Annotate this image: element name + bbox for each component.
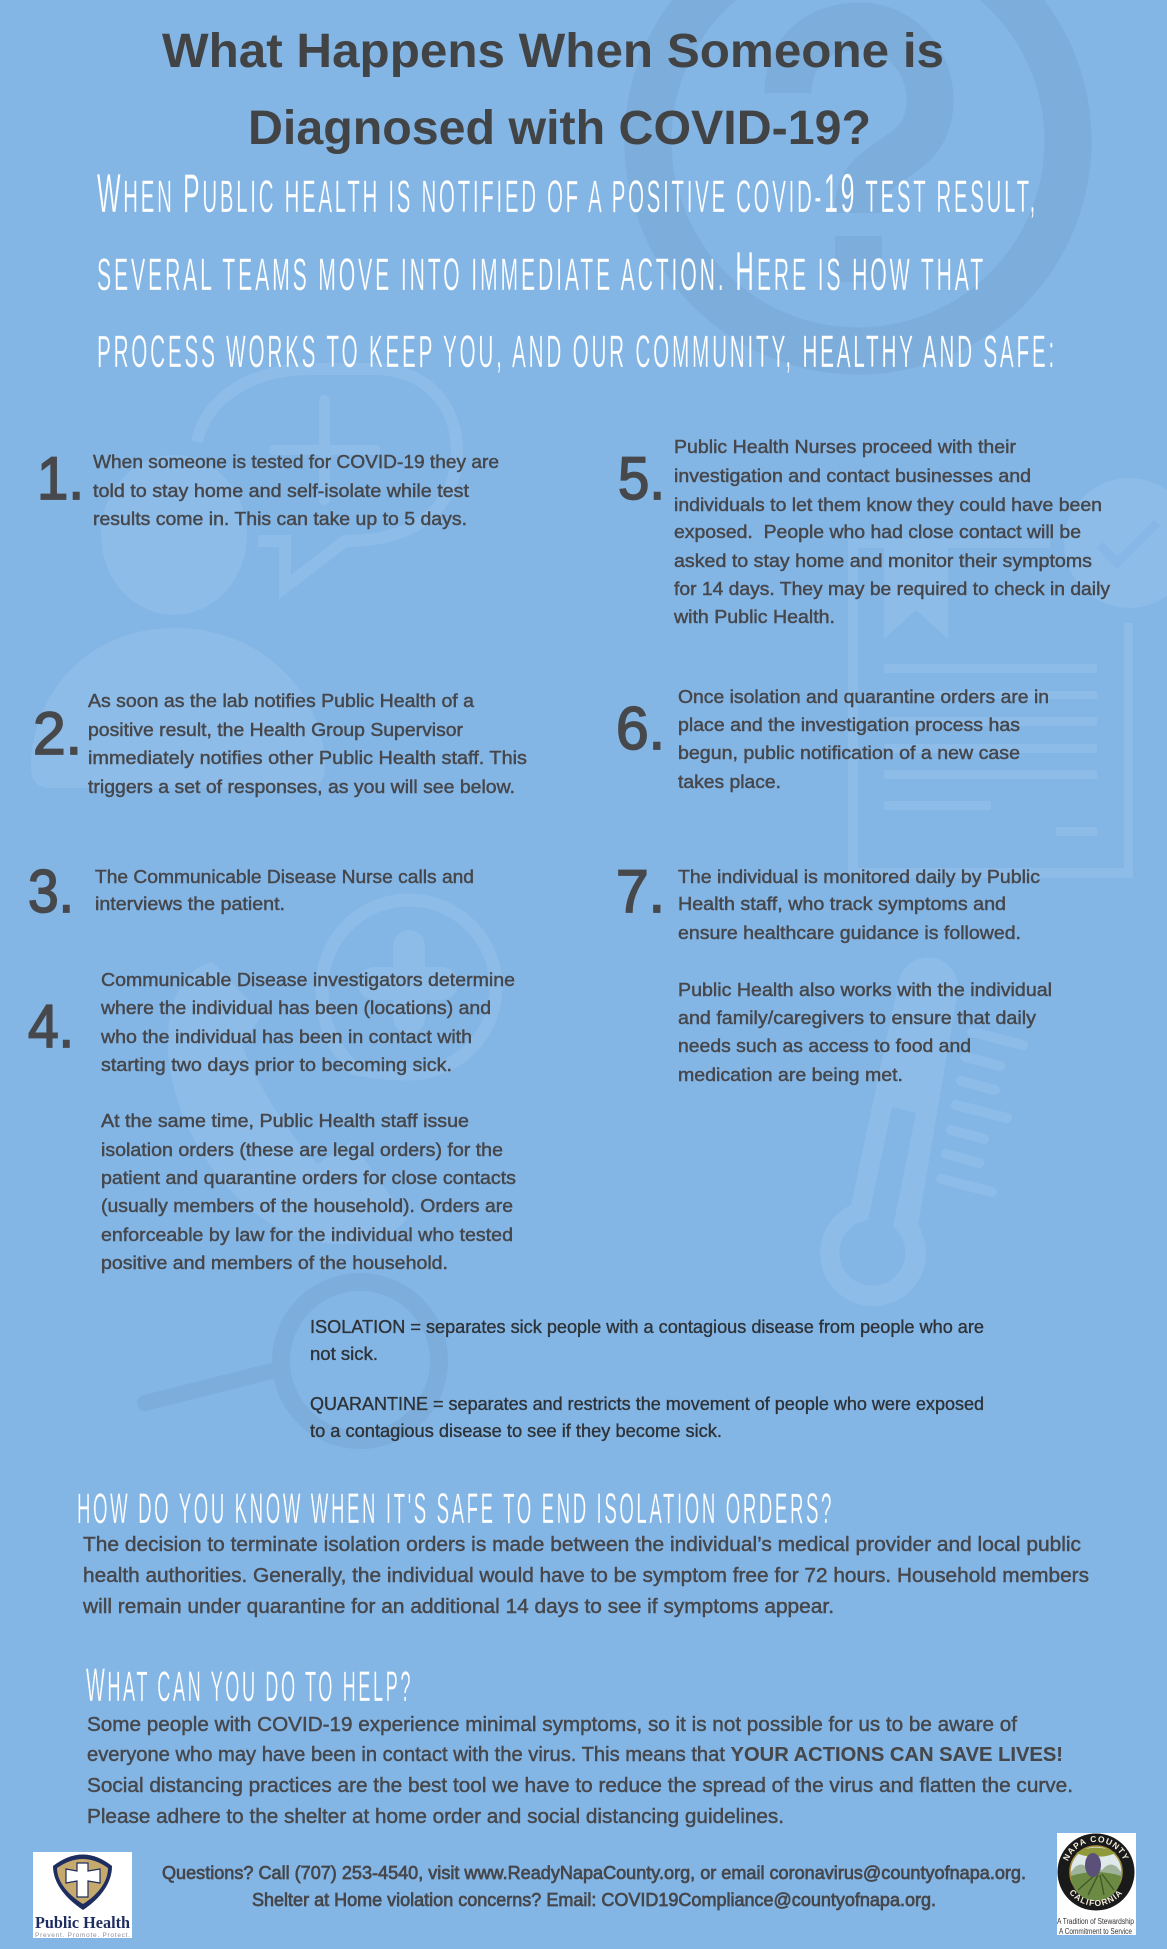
step 2 (33, 690, 527, 797)
step 7: 7. (616, 858, 665, 925)
step 4: patient and quarantine orders for close contacts (101, 1167, 516, 1188)
contact text (162, 1862, 1026, 1910)
step 5: individuals to let them know they could have been (674, 494, 1102, 515)
step 2: triggers a set of responses, as you will see below. (88, 776, 515, 797)
step 5 (618, 436, 1111, 627)
step 4: where the individual has been (locations) and (100, 997, 491, 1018)
step 5: for 14 days. They may be required to check in daily (674, 578, 1111, 599)
step 5: with Public Health. (673, 606, 835, 627)
step 5: 5. (618, 445, 665, 512)
logo: Napa County seal: A Tradition of Stewardship (1057, 1917, 1134, 1926)
step 1: When someone is tested for COVID-19 they are (93, 451, 499, 472)
step 4: Communicable Disease investigators determine (101, 969, 515, 990)
definitions: isolation and quarantine: not sick. (310, 1344, 378, 1364)
logo: Public Health (33, 1852, 132, 1939)
logo: Napa County seal: NAPA COUNTY (1062, 1836, 1129, 1861)
step 4: who the individual has been in contact with (100, 1026, 472, 1047)
icon: question mark in circle (648, 0, 1068, 351)
definitions: isolation and quarantine: to a contagious disease to see if they become sick. (310, 1421, 722, 1441)
step 5: Public Health Nurses proceed with their (674, 436, 1016, 457)
contact text: Questions? Call (707) 253-4540, visit www.ReadyNapaCounty.org, or email coronavirus@countyofnapa.org. (162, 1862, 1026, 1883)
text: ending isolation (82, 1533, 1089, 1618)
step 7 (616, 858, 1052, 1085)
logo: Napa County seal: CALIFORNIA (1070, 1890, 1122, 1906)
step 3 (28, 858, 474, 925)
step 7: and family/caregivers to ensure that daily (678, 1007, 1037, 1028)
step 2: immediately notifies other Public Health staff. This (88, 747, 527, 768)
step 5: exposed. People who had close contact will be (674, 521, 1081, 542)
step 4: 4. (28, 993, 74, 1060)
text: what can you do: Social distancing practices are the best tool we have to reduce the spread of the virus and flatten the curve. (87, 1774, 1073, 1797)
step 4: At the same time, Public Health staff issue (101, 1110, 469, 1131)
title: What Happens When Someone is (162, 25, 944, 78)
step 6: takes place. (678, 771, 781, 792)
step 7: needs such as access to food and (678, 1035, 971, 1056)
step 6 (616, 686, 1049, 792)
icon: thermometer (820, 957, 1023, 1306)
icon: magnifying glass (145, 1282, 439, 1440)
step 6: Once isolation and quarantine orders are in (678, 686, 1049, 707)
step 6: begun, public notification of a new case (678, 742, 1020, 763)
logo: Napa County seal (1057, 1833, 1136, 1936)
text: WHAT CAN YOU DO TO HELP? (86, 1658, 413, 1711)
definitions: isolation and quarantine: QUARANTINE = separates and restricts the movement of people who were exposed (310, 1394, 984, 1414)
icon: document with check badge (848, 478, 1167, 878)
step 7: Health staff, who track symptoms and (678, 893, 1006, 914)
step 3: 3. (28, 858, 74, 925)
step 1: results come in. This can take up to 5 days. (93, 508, 467, 529)
step 5: asked to stay home and monitor their symptoms (674, 550, 1092, 571)
step 3: The Communicable Disease Nurse calls and (95, 866, 474, 887)
step 6: 6. (616, 695, 665, 762)
logo: Napa County seal: A Commitment to Service (1059, 1927, 1132, 1936)
step 4: (usually members of the household). Orders are (101, 1195, 513, 1216)
text: ending isolation: will remain under quarantine for an additional 14 days to see if symptoms appear. (82, 1595, 834, 1618)
logo: Public Health: Prevent. Promote. Protect. (35, 1932, 130, 1939)
intro text (97, 162, 1057, 377)
step 4: isolation orders (these are legal orders) for the (101, 1139, 503, 1160)
step 1: 1. (37, 445, 84, 512)
step 5: investigation and contact businesses and (674, 465, 1031, 486)
text: ending isolation: The decision to terminate isolation orders is made between the individual’s medical provider and local public (83, 1533, 1081, 1556)
title: Diagnosed with COVID-19? (248, 102, 871, 155)
definitions: isolation and quarantine: ISOLATION = separates sick people with a contagious disease from people who are (310, 1317, 984, 1337)
contact text: Shelter at Home violation concerns? Email: COVID19Compliance@countyofnapa.org. (252, 1889, 936, 1910)
step 2: positive result, the Health Group Supervisor (88, 719, 463, 740)
step 4: positive and members of the household. (101, 1252, 448, 1273)
step 4: enforceable by law for the individual who tested (101, 1224, 513, 1245)
step 7: Public Health also works with the individual (678, 979, 1052, 1000)
step 4 (28, 969, 516, 1273)
icon: person silhouette (31, 455, 325, 788)
step 7: medication are being met. (678, 1064, 903, 1085)
text: what can you do: Some people with COVID-19 experience minimal symptoms, so it is not possible for us to be aware of (87, 1713, 1017, 1736)
step 1 (37, 445, 499, 529)
icon: telephone handset with plus bubble (168, 900, 496, 1244)
step 1: told to stay home and self-isolate while test (93, 480, 469, 501)
step 6: place and the investigation process has (678, 714, 1020, 735)
icon: speech bubble with plus (197, 369, 457, 587)
text: what can you do: Please adhere to the shelter at home order and social distancing guidelines. (87, 1805, 784, 1828)
step 7: ensure healthcare guidance is followed. (678, 922, 1021, 943)
text: what can you do (87, 1713, 1073, 1828)
step 7: The individual is monitored daily by Public (678, 866, 1040, 887)
step 2: 2. (33, 700, 82, 767)
text: ending isolation: health authorities. Generally, the individual would have to be symptom free for 72 hours. Household members (83, 1564, 1089, 1587)
definitions: isolation and quarantine (310, 1317, 984, 1441)
step 2: As soon as the lab notifies Public Health of a (88, 690, 475, 711)
logo: Public Health: Public Health (35, 1913, 131, 1932)
title (162, 25, 944, 155)
text: what can you do: everyone who may have been in contact with the virus. This means that YOUR ACTIONS CAN SAVE LIVES! (87, 1743, 1063, 1766)
step 3: interviews the patient. (95, 893, 285, 914)
step 4: starting two days prior to becoming sick. (101, 1054, 452, 1075)
